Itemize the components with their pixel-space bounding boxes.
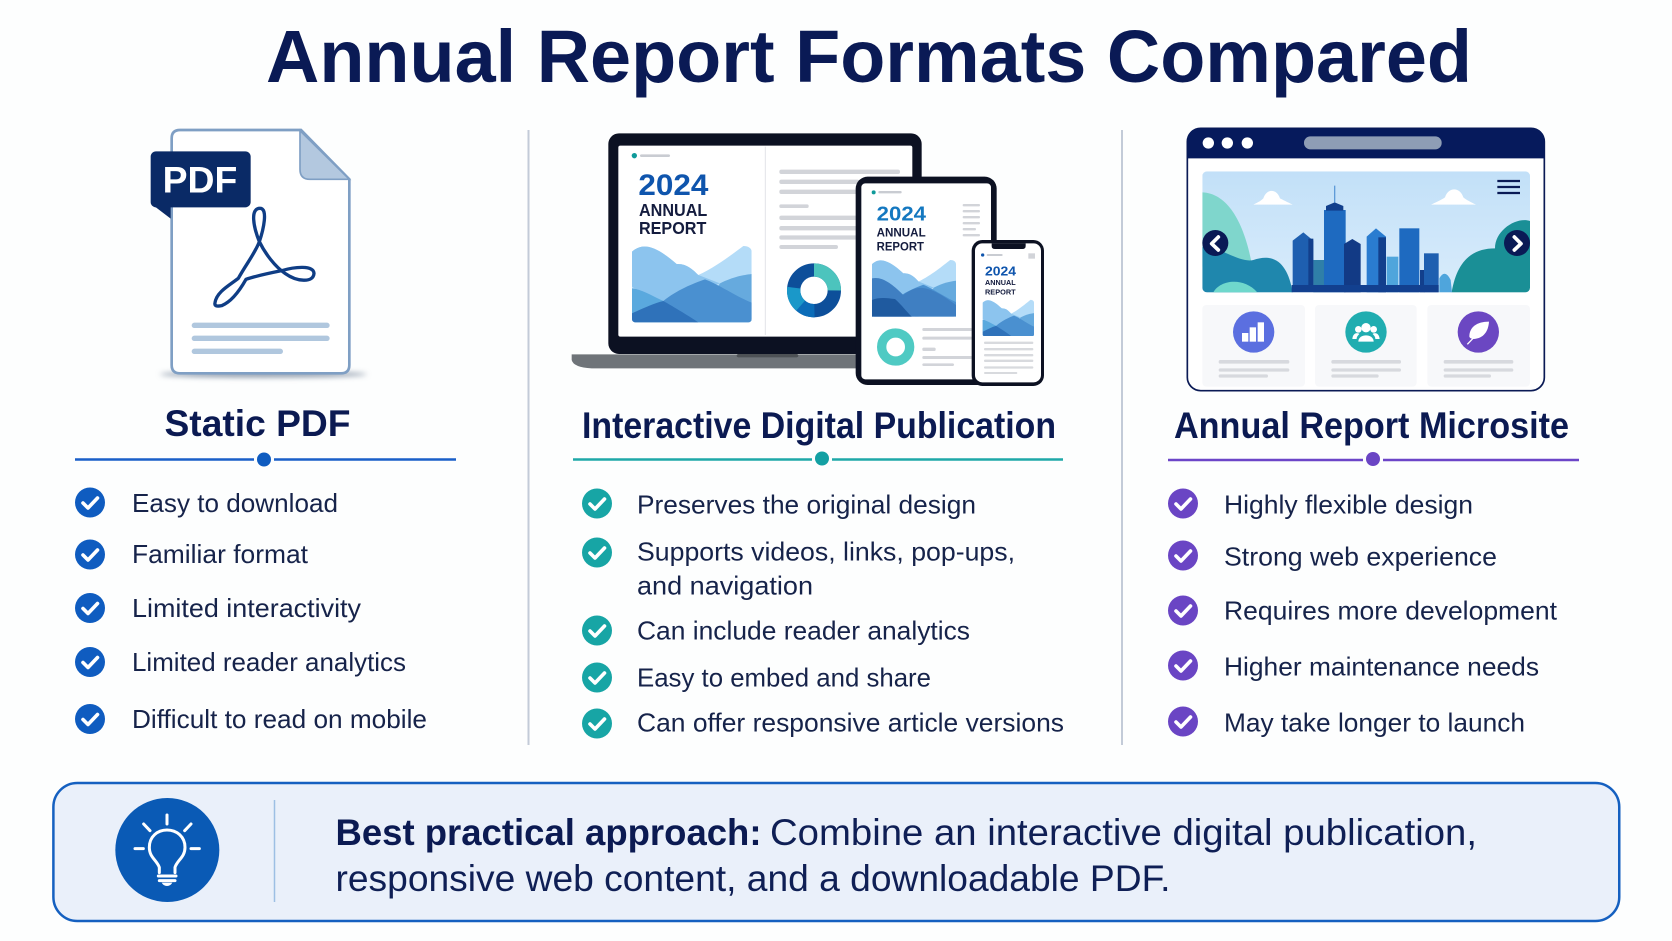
list: interactive publication features: Preserves the original design — [637, 490, 976, 520]
phone: REPORT — [985, 287, 1016, 296]
list: microsite features: Strong web experience — [1224, 542, 1497, 572]
callout text: responsive web content, and a downloadable PDF. — [336, 858, 1170, 899]
laptop — [572, 133, 922, 368]
heading underline — [75, 452, 456, 466]
cards — [1202, 305, 1530, 387]
tablet: ANNUAL — [877, 226, 926, 240]
list: static PDF features: Familiar format — [132, 539, 309, 569]
callout: best practical approach — [53, 783, 1619, 921]
phone: 2024 — [985, 264, 1017, 279]
list: static PDF features: Difficult to read on mobile — [132, 704, 427, 734]
list: static PDF features — [75, 488, 427, 734]
laptop: REPORT — [639, 218, 707, 238]
callout text: Best practical approach: — [336, 812, 762, 853]
list: interactive publication features: Easy to embed and share — [637, 662, 931, 692]
carousel arrows — [1202, 230, 1530, 256]
list: interactive publication features — [582, 488, 1064, 738]
list: static PDF features: Easy to download — [132, 488, 338, 518]
phone: ANNUAL — [985, 278, 1016, 287]
heading underline — [573, 452, 1063, 466]
panel: annual report microsite — [1168, 128, 1579, 738]
list: microsite features: May take longer to launch — [1224, 708, 1525, 738]
list: static PDF features: Limited interactivity — [132, 593, 361, 623]
list: static PDF features: Limited reader analytics — [132, 647, 406, 677]
tablet — [856, 177, 997, 385]
donut chart — [794, 270, 834, 311]
callout text — [336, 812, 1477, 899]
list: microsite features: Requires more development — [1224, 596, 1558, 626]
tablet: 2024 — [877, 203, 927, 226]
heading: Static PDF: Static PDF — [164, 403, 350, 444]
heading: Annual Report Microsite: Annual Report Microsite — [1174, 405, 1569, 446]
icon: browser window — [1187, 128, 1544, 391]
panel: interactive digital publication — [572, 133, 1064, 739]
icon: light bulb — [115, 798, 219, 902]
heading underline — [1168, 452, 1579, 466]
title: Annual Report Formats Compared — [266, 15, 1472, 98]
laptop: ANNUAL — [639, 200, 708, 220]
teal donut — [882, 333, 910, 361]
list: microsite features: Highly flexible design — [1224, 490, 1473, 520]
icon: PDF document: PDF — [163, 158, 237, 200]
list: microsite features: Higher maintenance needs — [1224, 652, 1539, 682]
phone — [972, 240, 1044, 386]
heading: Interactive Digital Publication: Interactive Digital Publication — [582, 405, 1056, 446]
list: interactive publication features: Supports videos, links, pop-ups, — [637, 536, 1015, 566]
list: interactive publication features: Can offer responsive article versions — [637, 708, 1064, 738]
panel: static PDF — [75, 130, 456, 734]
tablet: REPORT — [877, 240, 924, 254]
list: microsite features — [1168, 488, 1558, 738]
callout text: Combine an interactive digital publication, — [770, 812, 1477, 853]
laptop: 2024 — [638, 169, 709, 202]
hero image: city skyline — [1202, 171, 1530, 292]
icon: PDF document — [151, 130, 367, 377]
list: interactive publication features: and navigation — [637, 570, 813, 600]
list: interactive publication features: Can include reader analytics — [637, 616, 970, 646]
icon: laptop, tablet and phone — [572, 133, 1044, 386]
